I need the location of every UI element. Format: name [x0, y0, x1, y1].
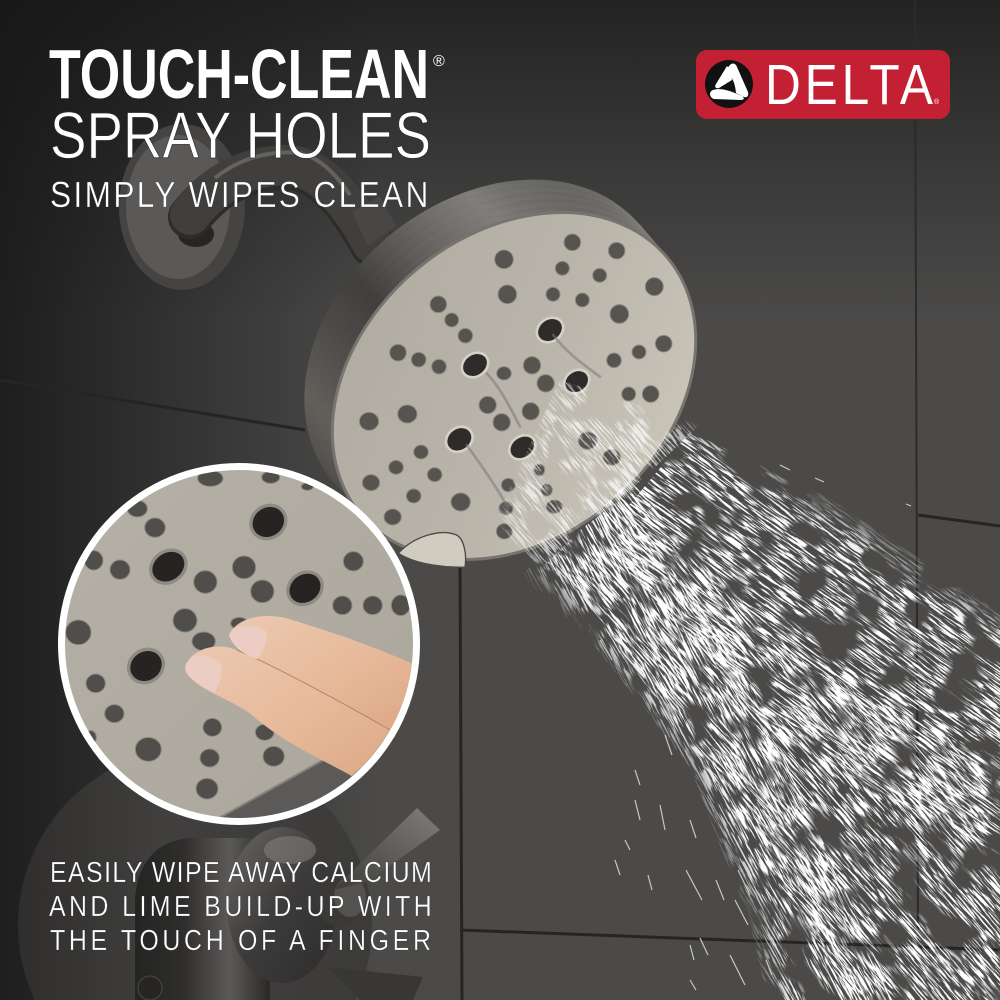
title	[49, 35, 445, 215]
zoomed large nozzles	[122, 499, 329, 689]
lower lever	[327, 967, 423, 1000]
caption	[49, 856, 432, 956]
shower head	[235, 108, 765, 631]
water spray	[498, 380, 1000, 1000]
spray holes on face	[359, 234, 672, 539]
fingers	[185, 616, 412, 776]
handle notch at bottom of face	[398, 533, 466, 567]
Delta logo: ®	[934, 98, 940, 106]
caption: THE TOUCH OF A FINGER	[50, 924, 431, 956]
valve trim and handle	[18, 748, 440, 1000]
caption: AND LIME BUILD-UP WITH	[49, 890, 432, 922]
title: SPRAY HOLES	[50, 98, 431, 172]
valve plate	[18, 748, 372, 1000]
screw	[138, 976, 162, 1000]
zoomed small holes	[66, 470, 410, 799]
large jet nozzles	[441, 313, 594, 464]
zoom circle: finger wiping spray holes	[55, 460, 425, 830]
head body	[235, 108, 760, 625]
head face	[263, 141, 765, 631]
finger nails	[229, 626, 267, 659]
Delta logo	[696, 50, 950, 119]
title: SIMPLY WIPES CLEAN	[50, 175, 428, 215]
title: ®	[433, 53, 445, 70]
caption: EASILY WIPE AWAY CALCIUM	[50, 856, 432, 888]
upper lever	[333, 808, 440, 890]
valve knob	[135, 838, 270, 1000]
wall area inside circle	[219, 760, 361, 818]
shower arm and wall flange	[119, 124, 396, 290]
icon: Delta triangle mark	[705, 60, 753, 108]
title: TOUCH-CLEAN	[49, 35, 429, 113]
stray droplets	[600, 432, 911, 990]
Delta logo: DELTA	[765, 54, 933, 117]
water jets leaving nozzles	[467, 335, 600, 508]
